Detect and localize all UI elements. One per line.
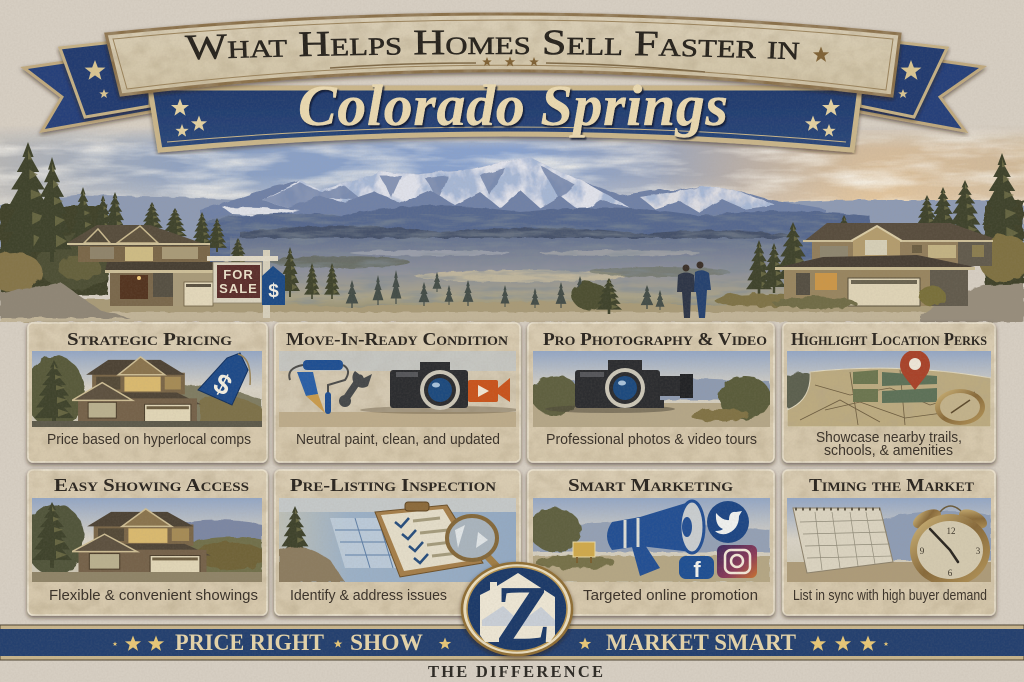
left rocks	[0, 282, 130, 318]
right outer ribbon tail	[850, 48, 983, 131]
tagline left: PRICE RIGHT	[175, 630, 324, 655]
location script title: Colorado Springs	[298, 73, 728, 138]
parchment inner line	[113, 20, 893, 90]
left outer ribbon tail	[24, 48, 160, 131]
title curve and heading	[120, 54, 865, 66]
icon: twitter	[707, 501, 749, 543]
foothills	[200, 206, 870, 262]
caption: Showcase nearby trails,	[816, 429, 962, 446]
panel: Move-In-Ready Condition	[275, 323, 520, 462]
icon: wrench	[339, 371, 372, 407]
illustration: camera in landscape	[533, 351, 770, 427]
valley floor	[230, 238, 800, 320]
icon: paint brush	[297, 372, 325, 413]
panel: Easy Showing Access	[25, 470, 267, 615]
icon: compass	[935, 389, 985, 425]
caption: Neutral paint, clean, and updated	[296, 431, 500, 448]
clock numeral 9: 9	[920, 546, 925, 556]
icon: facebook: f	[693, 557, 701, 582]
icon: clipboard checklist	[375, 502, 483, 577]
tagline right: MARKET SMART	[606, 630, 796, 655]
price tag	[262, 266, 285, 305]
left inner ribbon	[60, 38, 150, 117]
footer caption: THE DIFFERENCE	[428, 662, 603, 681]
house outline	[480, 573, 555, 642]
tagline middle: SHOW	[350, 630, 423, 655]
icon: map pin	[900, 350, 930, 390]
icon: camera with telephoto lens	[575, 360, 693, 408]
card frame	[28, 470, 267, 615]
clock numeral 6: 6	[948, 568, 953, 578]
panel: Strategic Pricing	[25, 323, 267, 462]
heading: Strategic Pricing	[67, 329, 232, 349]
for sale text: FOR	[223, 267, 254, 282]
illustration: tools and camera	[279, 351, 516, 427]
heading: Pre-Listing Inspection	[290, 475, 497, 495]
footer stars	[113, 636, 888, 651]
band blue fill	[0, 629, 1024, 656]
icon: magnifying glass	[447, 516, 505, 575]
caption: Price based on hyperlocal comps	[47, 431, 251, 448]
icon: yellow sign	[573, 542, 595, 563]
sky with clouds	[0, 129, 1024, 224]
card frame	[275, 323, 520, 462]
illustration: calendar and alarm clock	[787, 498, 991, 582]
main mountain peak	[200, 157, 825, 245]
blue banner	[150, 88, 860, 150]
panel: Highlight Location Perks	[780, 323, 995, 462]
blue banner stars	[171, 98, 840, 137]
icon: facebook	[679, 556, 714, 582]
caption: Identify & address issues	[290, 587, 447, 604]
logo badge	[462, 563, 572, 662]
panel: Timing the Market	[783, 470, 995, 615]
panel: Pro Photography & Video	[528, 323, 774, 462]
ribbon stars	[85, 60, 921, 98]
map green regions	[853, 370, 937, 403]
left forest	[0, 142, 401, 305]
parchment ornament stars	[482, 46, 829, 66]
valley texture	[200, 214, 840, 314]
couple looking at view	[677, 262, 711, 318]
panel: Smart Marketing	[528, 470, 774, 615]
panorama: mountain landscape	[0, 125, 1024, 322]
illustration: megaphone and social icons	[533, 498, 770, 582]
illustration: map with pin and compass	[787, 351, 991, 427]
icon: dollar price tag: $	[209, 367, 237, 402]
title banner	[20, 12, 988, 154]
footer banner	[0, 625, 1024, 660]
right house	[773, 223, 993, 309]
logo mountains	[482, 606, 555, 626]
heading: Move-In-Ready Condition	[286, 329, 509, 349]
caption: List in sync with high buyer demand	[793, 587, 987, 604]
heading: Smart Marketing	[568, 475, 733, 495]
clock numeral 3: 3	[976, 546, 981, 556]
icon: paint roller	[289, 360, 348, 414]
card frame	[783, 323, 995, 462]
icon: camera	[390, 362, 468, 410]
clock numerals: 12	[946, 526, 956, 536]
right rocks	[920, 284, 1024, 322]
illustration: house with hills	[32, 498, 262, 582]
left house	[67, 225, 214, 306]
heading: Timing the Market	[809, 475, 974, 495]
for sale sign	[207, 250, 285, 318]
heading: Highlight Location Perks	[791, 329, 987, 349]
parchment banner	[106, 14, 900, 96]
icon: video camera	[468, 378, 510, 402]
card frame	[528, 323, 774, 462]
card frame	[275, 470, 520, 615]
foreground ground	[0, 296, 1024, 322]
icon: instagram	[717, 545, 757, 578]
heading: What Helps Homes Sell Faster in	[184, 30, 800, 60]
icon: alarm clock	[910, 505, 990, 586]
caption: Professional photos & video tours	[546, 431, 757, 448]
card frame	[783, 470, 995, 615]
valley conifers	[346, 272, 664, 310]
band outer edge	[0, 625, 1024, 660]
icon: megaphone	[607, 501, 704, 576]
caption: Flexible & convenient showings	[49, 587, 258, 604]
sale text: SALE	[219, 281, 258, 296]
heading: Pro Photography & Video	[543, 329, 767, 349]
right forest	[572, 153, 1024, 314]
caption line 2: schools, & amenities	[824, 442, 953, 459]
illustration: clipboard over blueprint	[279, 498, 516, 582]
distant ridge	[0, 195, 1024, 260]
caption: Targeted online promotion	[583, 587, 758, 604]
icon: dollar price tag	[198, 353, 250, 405]
logo letter: Z	[495, 569, 551, 662]
blue banner inner line	[167, 127, 846, 142]
icon: desk calendar	[793, 508, 893, 573]
illustration: house with price tag	[32, 351, 262, 427]
dollar sign: $	[268, 281, 279, 302]
right inner ribbon	[860, 38, 947, 117]
heading: Easy Showing Access	[54, 475, 249, 495]
card frame	[528, 470, 774, 615]
panel: Pre-Listing Inspection	[275, 470, 520, 615]
card frame	[28, 323, 267, 462]
